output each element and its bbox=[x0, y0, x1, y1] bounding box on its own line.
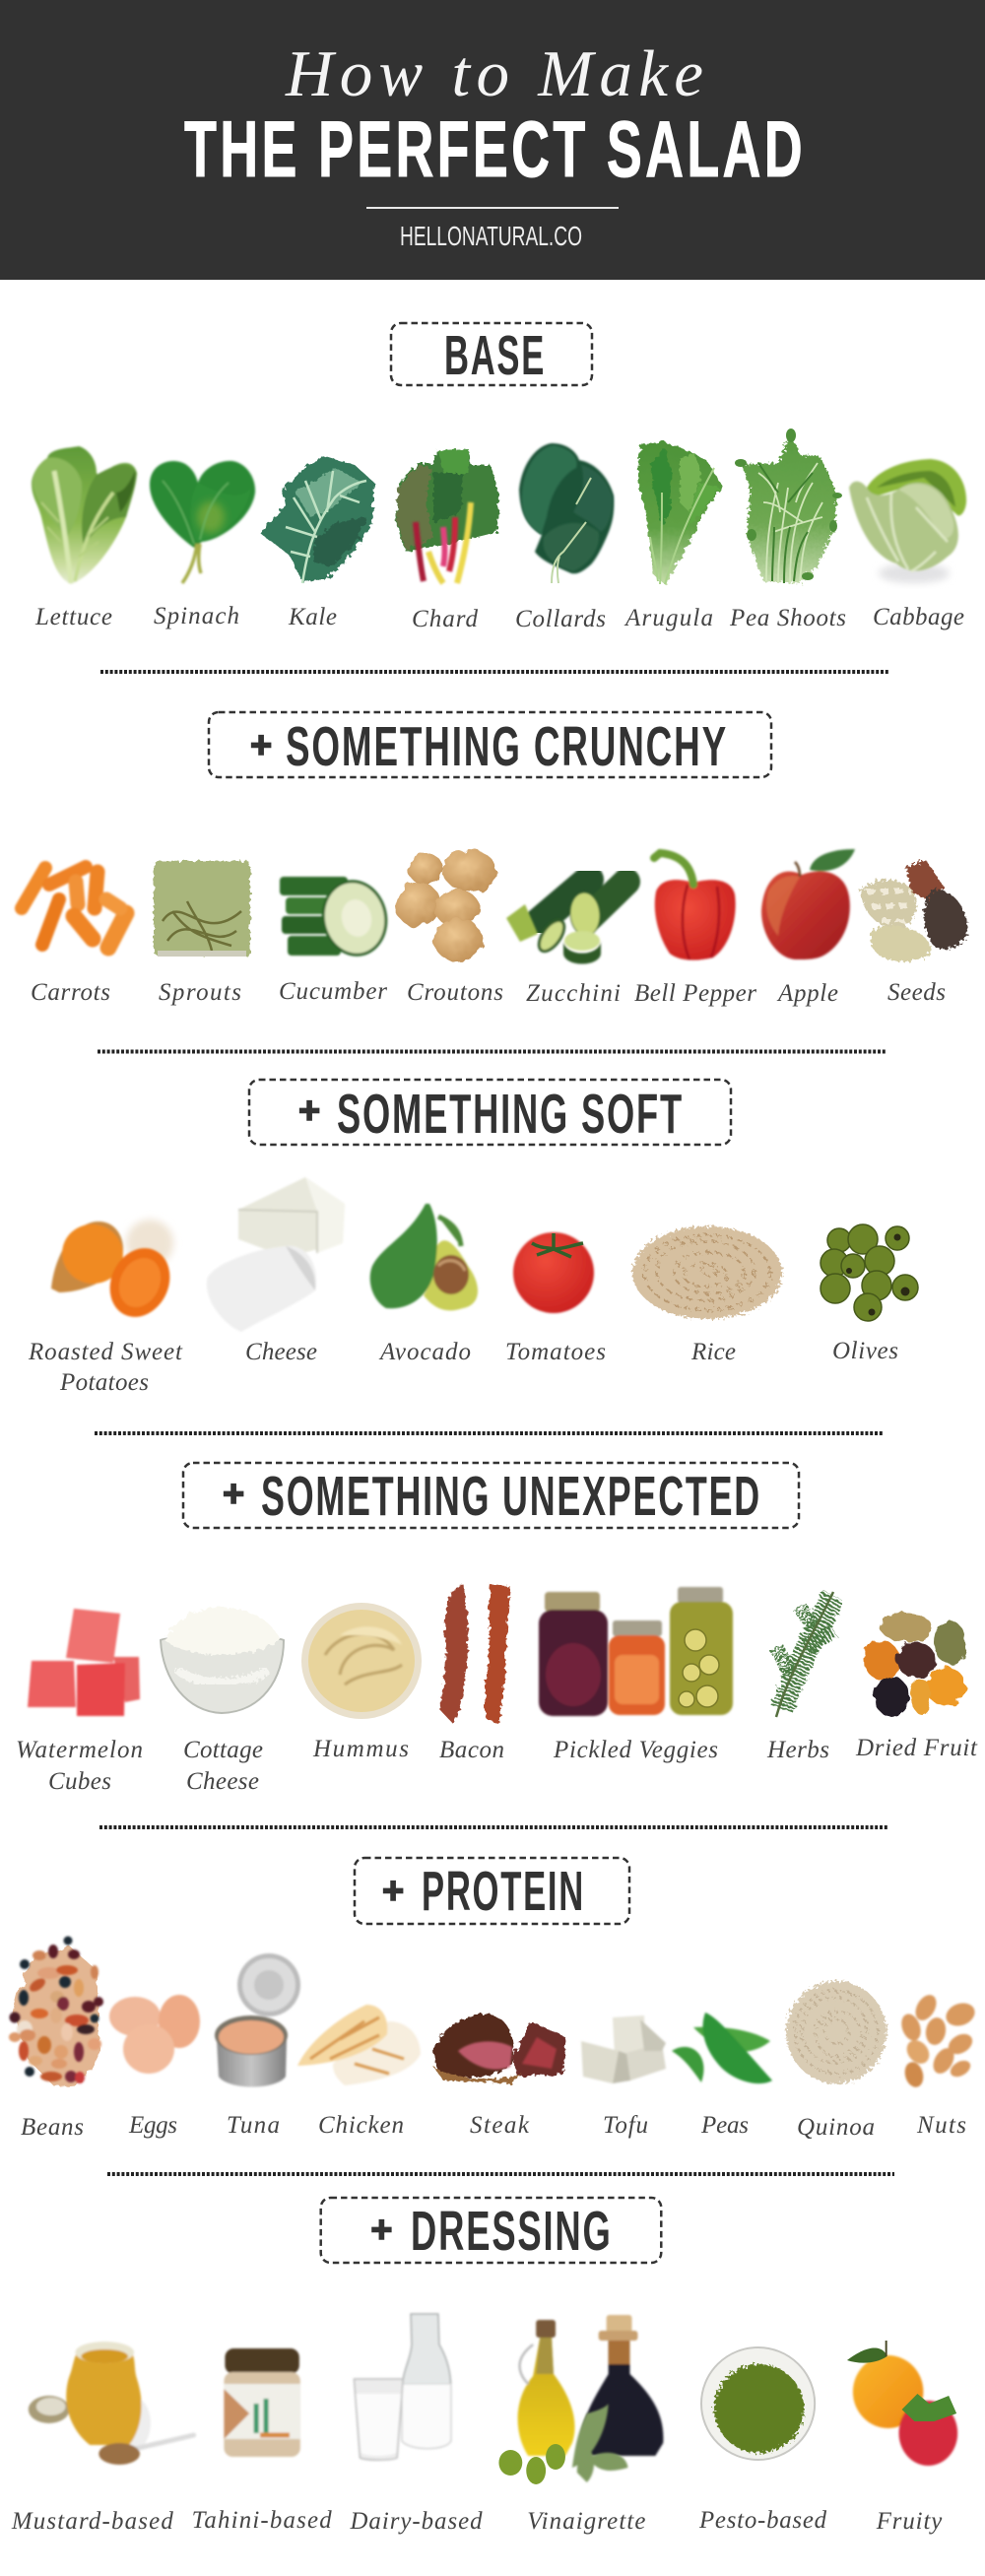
item: olives bbox=[821, 1224, 918, 1364]
item: cottage cheese bbox=[161, 1608, 284, 1795]
panel: something soft bbox=[28, 1080, 918, 1396]
item: steak bbox=[433, 2014, 565, 2139]
heading: something soft bbox=[249, 1080, 731, 1146]
heading: base: BASE bbox=[444, 324, 546, 387]
item: lettuce bbox=[32, 446, 137, 630]
item: carrots: Carrots bbox=[31, 979, 110, 1006]
heading: dressing: + bbox=[370, 2210, 392, 2251]
label: roasted sweet potatoes bbox=[28, 1339, 183, 1396]
item: tomatoes: Tomatoes bbox=[505, 1339, 606, 1365]
item: tahini-based: Tahini-based bbox=[192, 2507, 332, 2534]
item: hummus bbox=[301, 1603, 422, 1762]
item: eggs: Eggs bbox=[128, 2112, 177, 2139]
item: pesto-based: Pesto-based bbox=[698, 2507, 827, 2534]
item: chard: Chard bbox=[412, 606, 479, 632]
item: nuts bbox=[898, 1991, 978, 2139]
item: croutons: Croutons bbox=[407, 979, 503, 1006]
item: peas bbox=[672, 2013, 772, 2139]
item: pea shoots: Pea Shoots bbox=[729, 605, 846, 631]
label: roasted sweet potatoes: Potatoes bbox=[59, 1369, 149, 1396]
panel: base bbox=[32, 323, 966, 632]
heading: base bbox=[391, 323, 592, 387]
item: bacon: Bacon bbox=[439, 1737, 504, 1763]
item: arugula bbox=[624, 441, 722, 631]
item: steak: Steak bbox=[470, 2112, 530, 2139]
item: zucchini: Zucchini bbox=[526, 980, 621, 1007]
heading: dressing: DRESSING bbox=[411, 2201, 613, 2263]
item: collards bbox=[515, 443, 614, 632]
website: HELLONATURAL.CO bbox=[400, 221, 582, 251]
item: tofu bbox=[581, 2015, 666, 2139]
item: herbs bbox=[766, 1592, 833, 1763]
item: seeds: Seeds bbox=[887, 979, 946, 1006]
item: chicken bbox=[297, 2005, 421, 2139]
item: kale: Kale bbox=[288, 604, 337, 630]
item: dried fruit: Dried Fruit bbox=[855, 1735, 978, 1761]
panel: dressing bbox=[11, 2198, 957, 2535]
panel: protein bbox=[9, 1858, 978, 2141]
label: watermelon cubes: Cubes bbox=[48, 1768, 111, 1795]
item: apple: Apple bbox=[776, 980, 838, 1007]
item: spinach bbox=[150, 461, 255, 629]
item: croutons bbox=[395, 850, 503, 1006]
item: tuna: Tuna bbox=[227, 2112, 280, 2139]
item: lettuce: Lettuce bbox=[34, 604, 112, 630]
item: collards: Collards bbox=[515, 606, 606, 632]
label: watermelon cubes bbox=[16, 1737, 143, 1795]
item: roasted sweet potatoes bbox=[28, 1216, 183, 1396]
item: sprouts: Sprouts bbox=[159, 979, 241, 1006]
header banner bbox=[0, 0, 985, 280]
item: bacon bbox=[439, 1584, 510, 1763]
item: carrots bbox=[22, 867, 126, 1006]
item: rice bbox=[632, 1226, 782, 1365]
item: zucchini bbox=[506, 880, 626, 1007]
item: avocado bbox=[370, 1204, 478, 1365]
item: arugula: Arugula bbox=[624, 605, 713, 631]
item: fruity bbox=[847, 2341, 957, 2535]
item: fruity: Fruity bbox=[876, 2508, 943, 2535]
item: dairy-based: Dairy-based bbox=[349, 2508, 483, 2535]
label: cottage cheese bbox=[183, 1737, 263, 1795]
item: cabbage: Cabbage bbox=[873, 604, 964, 630]
item: cheese: Cheese bbox=[245, 1339, 317, 1365]
item: eggs bbox=[109, 1995, 200, 2139]
item: apple bbox=[761, 849, 855, 1007]
heading: something soft: SOMETHING SOFT bbox=[337, 1083, 684, 1146]
item: cucumber bbox=[279, 874, 394, 1005]
item: cucumber: Cucumber bbox=[279, 978, 387, 1005]
item: watermelon cubes bbox=[16, 1609, 143, 1795]
label: cottage cheese: Cottage bbox=[183, 1737, 263, 1763]
heading: something soft: + bbox=[298, 1090, 320, 1132]
heading: protein: + bbox=[382, 1871, 404, 1912]
panel: something unexpected bbox=[16, 1463, 978, 1795]
heading: something unexpected bbox=[183, 1463, 799, 1528]
item: pickled veggies: Pickled Veggies bbox=[553, 1737, 718, 1763]
heading: something crunchy: SOMETHING CRUNCHY bbox=[286, 715, 728, 778]
item: chicken: Chicken bbox=[318, 2112, 404, 2139]
item: tahini-based bbox=[192, 2348, 332, 2534]
item: bell pepper bbox=[634, 853, 756, 1007]
item: olives: Olives bbox=[832, 1338, 898, 1364]
item: spinach: Spinach bbox=[154, 603, 239, 629]
heading: something unexpected: + bbox=[223, 1474, 244, 1515]
item: tofu: Tofu bbox=[603, 2112, 648, 2139]
panel: something crunchy bbox=[22, 712, 967, 1007]
heading: protein bbox=[355, 1858, 629, 1924]
item: avocado: Avocado bbox=[378, 1339, 471, 1365]
label: cottage cheese: Cheese bbox=[186, 1768, 259, 1795]
item: peas: Peas bbox=[700, 2112, 749, 2139]
item: beans: Beans bbox=[21, 2114, 84, 2141]
item: kale bbox=[261, 456, 374, 630]
item: bell pepper: Bell Pepper bbox=[634, 980, 756, 1007]
item: cabbage bbox=[849, 459, 966, 630]
item: tomatoes bbox=[505, 1232, 606, 1365]
item: mustard-based: Mustard-based bbox=[11, 2508, 173, 2535]
heading: protein: PROTEIN bbox=[422, 1860, 585, 1923]
item: dried fruit bbox=[855, 1613, 978, 1761]
item: seeds bbox=[861, 860, 967, 1006]
item: rice: Rice bbox=[690, 1339, 736, 1365]
item: nuts: Nuts bbox=[916, 2112, 966, 2139]
item: dairy-based bbox=[349, 2314, 483, 2535]
item: cheese bbox=[207, 1177, 345, 1365]
item: sprouts bbox=[154, 861, 250, 1006]
item: vinaigrette: Vinaigrette bbox=[527, 2508, 645, 2535]
label: roasted sweet potatoes: Roasted Sweet bbox=[28, 1339, 183, 1365]
item: mustard-based bbox=[11, 2342, 194, 2535]
item: pickled veggies bbox=[539, 1587, 733, 1763]
heading: something crunchy: + bbox=[250, 725, 272, 766]
item: chard bbox=[396, 449, 498, 632]
item: beans bbox=[9, 1937, 103, 2141]
item: quinoa: Quinoa bbox=[797, 2114, 875, 2141]
heading: something crunchy bbox=[209, 712, 771, 778]
item: hummus: Hummus bbox=[312, 1736, 409, 1762]
label: watermelon cubes: Watermelon bbox=[16, 1737, 143, 1763]
item: quinoa bbox=[786, 1981, 886, 2141]
item: herbs: Herbs bbox=[766, 1737, 829, 1763]
item: tuna bbox=[215, 1953, 300, 2139]
item: pea shoots bbox=[729, 429, 846, 631]
item: pesto-based bbox=[698, 2347, 827, 2534]
item: vinaigrette bbox=[498, 2315, 663, 2535]
title: How to Make: How to Make bbox=[285, 37, 703, 110]
heading: dressing bbox=[321, 2198, 661, 2263]
